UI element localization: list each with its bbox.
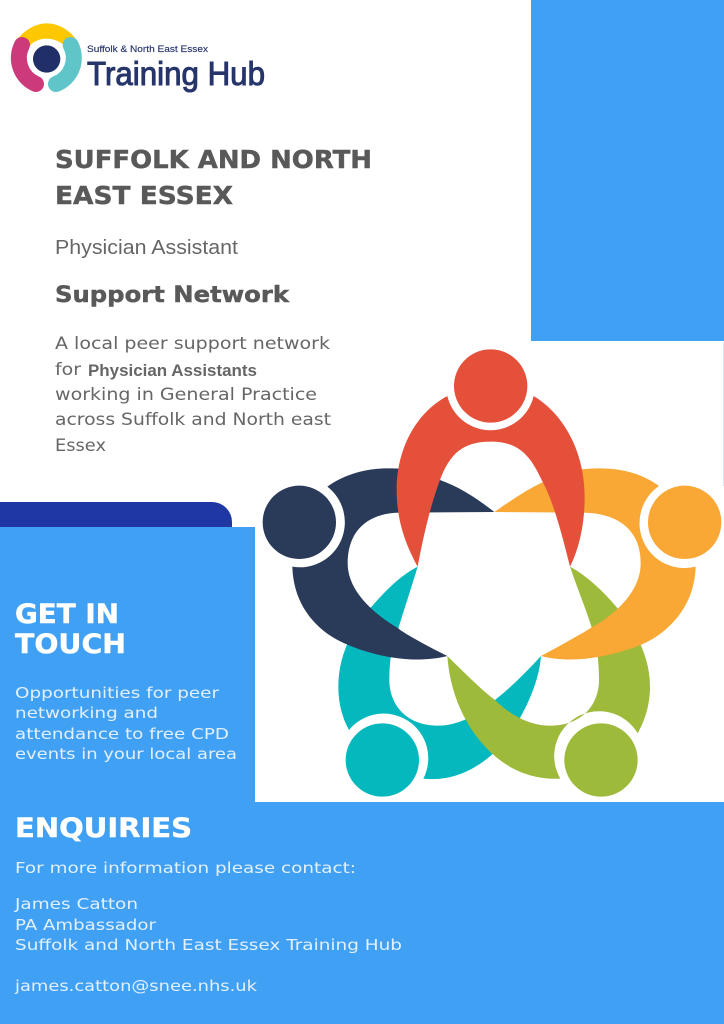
get in touch text: Opportunities for peer [15,684,220,702]
contact text [14,859,402,995]
logo subtitle: Suffolk & North East Essex [87,44,208,55]
heading: get in touch [15,599,126,660]
subtitle: Physician Assistant: Physician Assistant [55,237,238,259]
title: SUFFOLK AND NORTH [55,145,372,174]
top right blue block [531,0,724,341]
subtitle: Support Network: Support Network [55,282,290,308]
contact text: For more information please contact: [15,859,356,877]
dark blue tab [0,502,232,527]
title [55,145,372,210]
get in touch text: events in your local area [15,745,237,763]
heading: enquiries: ENQUIRIES [15,813,192,844]
logo: Training Hub [17,23,265,92]
person: navy [263,468,494,660]
description text: working in General Practice [55,385,317,404]
logo icon [17,23,77,84]
get in touch text [15,684,237,763]
description text: Essex [55,436,106,455]
figure: five people in a circle [263,349,721,797]
description text [55,334,332,455]
description text: across Suffolk and North east [55,410,332,429]
contact text: Suffolk and North East Essex Training Hub [15,936,402,954]
get in touch text: attendance to free CPD [15,725,229,743]
panel: get in touch [0,527,255,802]
person: orange [494,468,721,660]
heading: get in touch: GET IN [15,599,119,630]
heading: get in touch: TOUCH [15,629,126,660]
description text: A local peer support network [55,334,330,353]
panel: enquiries [0,802,724,1024]
contact text: PA Ambassador [15,916,157,934]
contact text: james.catton@snee.nhs.uk [14,977,257,995]
title: EAST ESSEX [55,181,233,210]
description text: for [55,360,81,379]
person: green [447,567,650,797]
get in touch text: networking and [15,704,158,722]
person: red [397,349,585,567]
logo name: Training Hub [87,55,265,92]
description text: Physician Assistants [88,361,257,380]
person: teal [338,567,541,797]
contact text: James Catton [14,895,138,913]
